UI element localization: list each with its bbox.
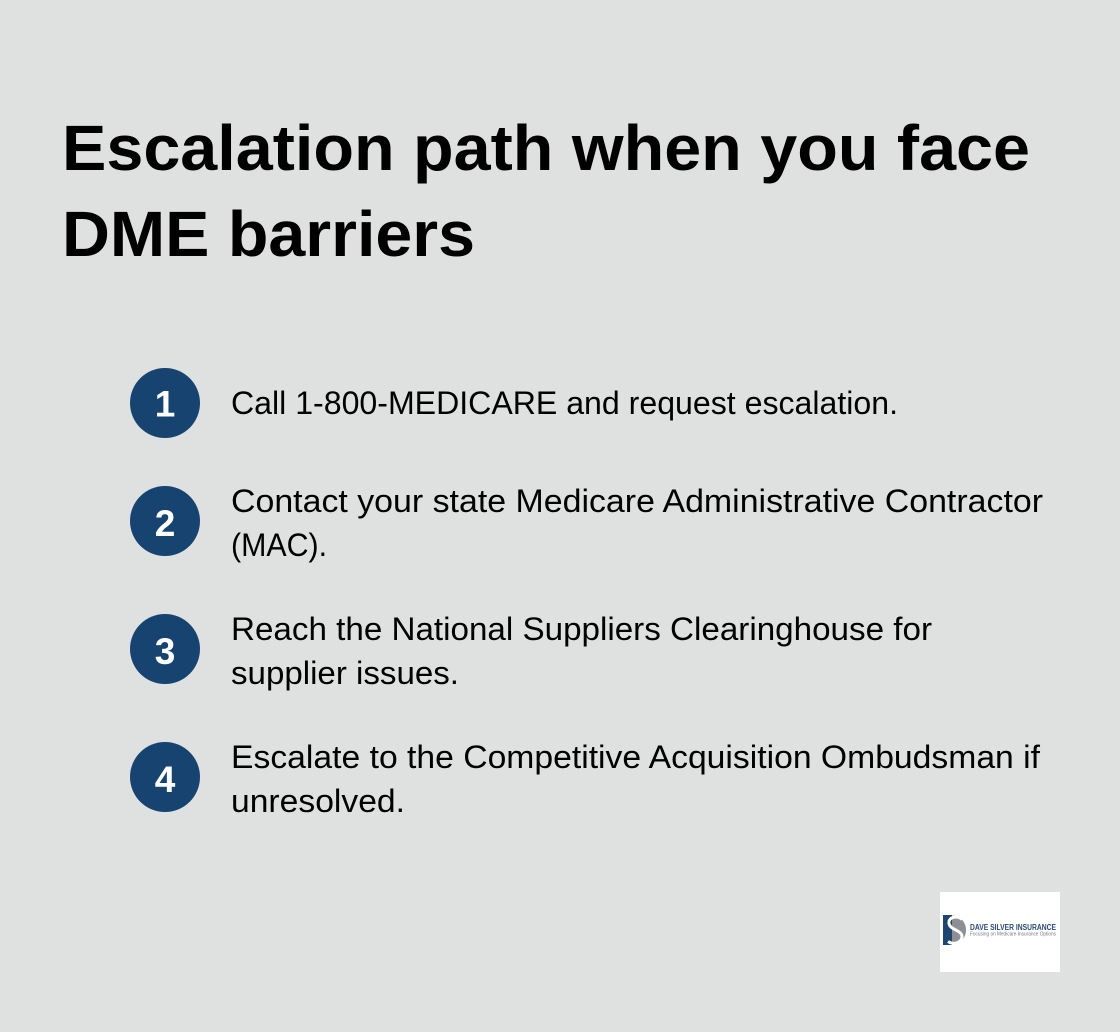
step 4 text: Escalate to the Competitive Acquisition Ombudsman if bbox=[231, 739, 1040, 775]
step 4 number badge: 4 bbox=[155, 759, 176, 800]
step 1 text: Call 1-800-MEDICARE and request escalation. bbox=[231, 385, 898, 421]
step 4 text bbox=[231, 739, 1040, 819]
step 2 bbox=[130, 483, 1043, 563]
logo wordmark: DAVE SILVER INSURANCE bbox=[970, 923, 1057, 932]
step 1 bbox=[130, 368, 898, 438]
step 2 number badge bbox=[130, 486, 200, 556]
logo: Dave Silver Insurance bbox=[940, 892, 1060, 972]
step 3 text: Reach the National Suppliers Clearinghouse for bbox=[231, 611, 932, 647]
icon: S monogram bbox=[943, 915, 966, 945]
step 3 number badge bbox=[130, 614, 200, 684]
step 4 text: unresolved. bbox=[231, 783, 405, 819]
step 2 text: (MAC). bbox=[231, 527, 327, 563]
title bbox=[62, 112, 1030, 270]
step 2 number badge: 2 bbox=[155, 503, 175, 544]
step 1 number badge bbox=[130, 368, 200, 438]
step 3 number badge: 3 bbox=[155, 631, 175, 672]
step 1 number badge: 1 bbox=[155, 384, 175, 424]
step 3 text bbox=[231, 611, 932, 691]
title: DME barriers bbox=[62, 198, 475, 270]
logo tagline: Focusing on Medicare Insurance Options bbox=[970, 932, 1056, 938]
step 2 text bbox=[231, 483, 1043, 563]
title: Escalation path when you face bbox=[62, 112, 1030, 184]
step 3 text: supplier issues. bbox=[231, 655, 459, 691]
step 4 bbox=[130, 739, 1040, 819]
step 4 number badge bbox=[130, 742, 200, 812]
step 3 bbox=[130, 611, 932, 691]
step 2 text: Contact your state Medicare Administrative Contractor bbox=[231, 483, 1043, 519]
